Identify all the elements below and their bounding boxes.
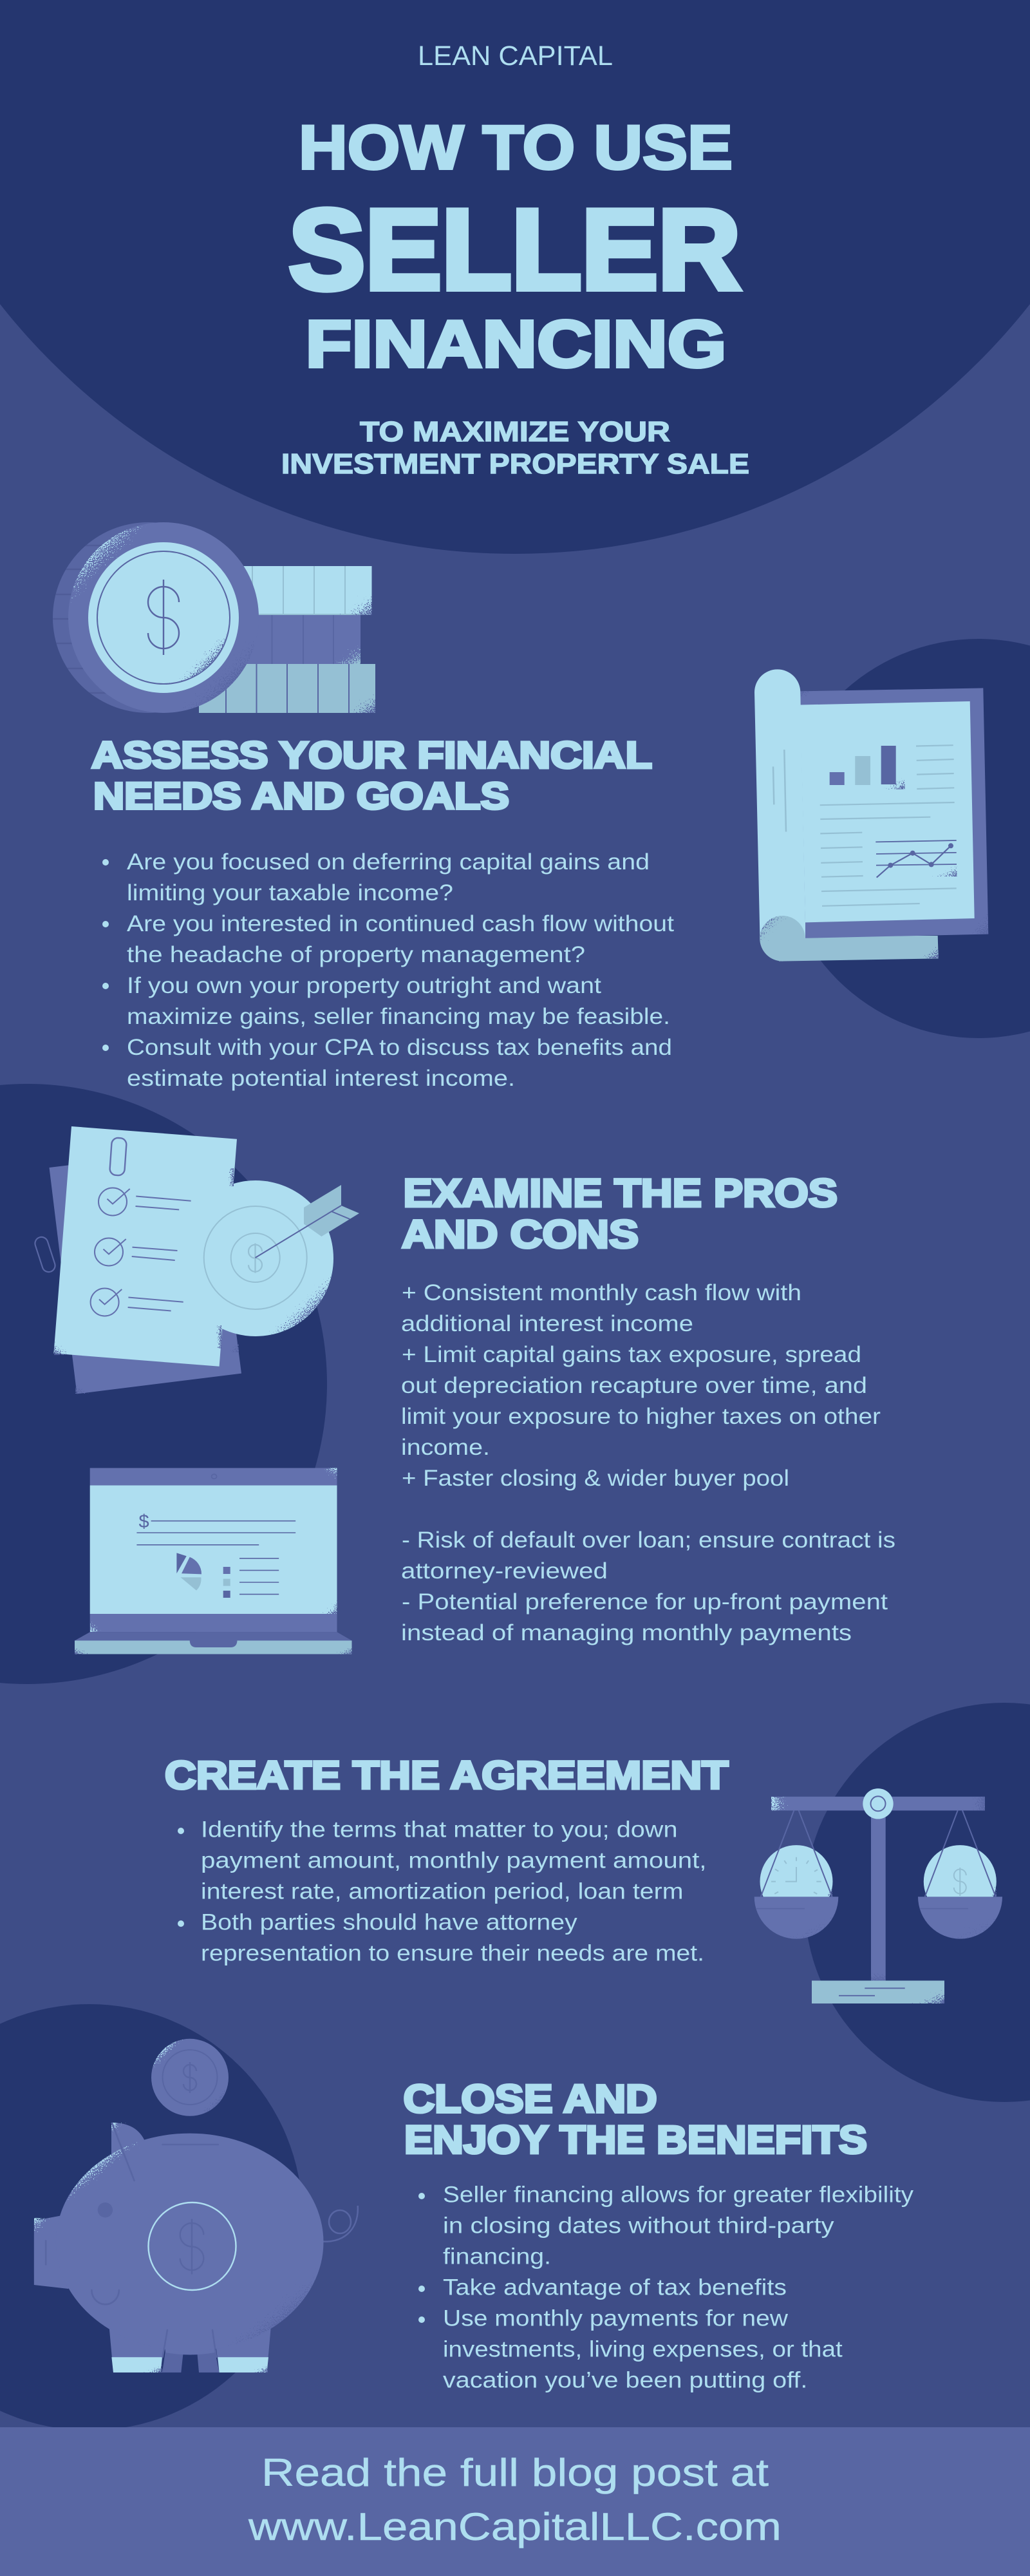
text block: assess bullets: maximize gains, seller financing may be feasible.: [127, 1003, 670, 1029]
pig hooves: [111, 2357, 268, 2372]
text block: agreement bullets: Both parties should have attorney: [201, 1909, 577, 1935]
text block: pros: [401, 1280, 881, 1491]
check item 2: [95, 1238, 178, 1266]
text block: agreement bullets: representation to ensure their needs are met.: [201, 1940, 704, 1966]
text block: pros: income.: [401, 1434, 490, 1460]
scale beam: [771, 1797, 985, 1810]
title: SELLER: [288, 185, 740, 313]
heading: close and enjoy: CLOSE AND: [404, 2077, 657, 2121]
rolled page: [754, 669, 805, 961]
heading: pros and cons: [402, 1171, 838, 1256]
text block: pros: + Faster closing & wider buyer pool: [402, 1465, 789, 1491]
line chart: [876, 840, 957, 878]
text block: pros: + Limit capital gains tax exposure, spread: [402, 1341, 861, 1367]
laptop screen: [90, 1485, 337, 1614]
pie chart: [176, 1553, 201, 1591]
text block: pros: limit your exposure to higher taxes on other: [401, 1403, 881, 1429]
text block: assess bullets: Consult with your CPA to discuss tax benefits and: [127, 1034, 672, 1060]
checklist sheet: [53, 1126, 237, 1367]
scale strings: [761, 1810, 996, 1897]
heading: create the agreement: CREATE THE AGREEMENT: [165, 1753, 729, 1797]
check item 3: [91, 1288, 183, 1316]
text block: cons: - Risk of default over loan; ensure contract is: [402, 1527, 895, 1553]
section 3 dark circle: [805, 1703, 1030, 2102]
title: FINANCING: [305, 307, 726, 381]
text block: assess bullets: Are you interested in continued cash flow without: [127, 911, 674, 936]
text block: assess bullets: Are you focused on deferring capital gains and: [127, 849, 650, 875]
front coin: [68, 522, 259, 713]
laptop lid: [90, 1468, 337, 1485]
scale base: [812, 1981, 944, 2003]
falling coin: [151, 2039, 229, 2116]
text block: assess bullets: If you own your property outright and want: [127, 972, 601, 998]
text block: cons: instead of managing monthly payments: [401, 1620, 852, 1645]
icon: laptop: [75, 1468, 351, 1654]
text block: benefits bullets: in closing dates without third-party: [443, 2212, 834, 2238]
icon: stacked coins: [52, 522, 375, 713]
text block: agreement bullets: Identify the terms that matter to you; down: [201, 1817, 677, 1842]
text block: cons: [401, 1527, 895, 1645]
text block: benefits bullets: [418, 2181, 913, 2392]
heading: close and enjoy: ENJOY THE BENEFITS: [404, 2118, 867, 2163]
footer call to action: www.LeanCapitalLLC.com: [248, 2505, 782, 2548]
icon: piggy bank: [34, 2039, 358, 2372]
heading: assess: NEEDS AND GOALS: [93, 775, 509, 817]
icon: checklist and target: [49, 1126, 359, 1394]
heading: pros and cons: AND CONS: [402, 1212, 639, 1256]
target rings: [204, 1206, 307, 1309]
text block: agreement bullets: [178, 1817, 707, 1966]
text block: benefits bullets: financing.: [443, 2243, 551, 2269]
pig far legs: [162, 2351, 220, 2372]
pig details: [46, 2123, 218, 2357]
back sheet: [800, 688, 988, 938]
text block: benefits bullets: vacation you’ve been putting off.: [443, 2367, 807, 2392]
text block: benefits bullets: Use monthly payments for new: [443, 2305, 788, 2331]
scale post: [871, 1813, 886, 1981]
subtitle: [281, 416, 749, 480]
paperclip: [109, 1137, 127, 1176]
back coin edge: [53, 522, 155, 713]
heading: close and enjoy: [404, 2077, 867, 2163]
scale hub: [863, 1788, 894, 1819]
text block: cons: attorney-reviewed: [401, 1558, 608, 1584]
coin stack bars: [199, 566, 375, 713]
text block: benefits bullets: investments, living expenses, or that: [443, 2336, 843, 2362]
text block: benefits bullets: Seller financing allows for greater flexibility: [443, 2181, 913, 2207]
heading: assess: ASSESS YOUR FINANCIAL: [91, 735, 652, 777]
left globe with clock: [760, 1845, 833, 1918]
header dark circle: [0, 0, 1030, 554]
title: [288, 113, 740, 381]
text lines: [820, 745, 957, 906]
legend: [223, 1558, 279, 1598]
right globe with dollar: [924, 1845, 997, 1918]
pig body: [34, 2123, 324, 2372]
back sheet: [49, 1148, 241, 1394]
subtitle: TO MAXIMIZE YOUR: [360, 416, 670, 448]
arrow: [255, 1185, 359, 1258]
brand name: LEAN CAPITAL: [418, 41, 613, 71]
bar chart: [830, 746, 905, 790]
text block: assess bullets: limiting your taxable income?: [127, 880, 453, 905]
text block: benefits bullets: Take advantage of tax benefits: [443, 2274, 787, 2300]
section 2 dark circle: [0, 1084, 327, 1684]
text block: agreement bullets: interest rate, amortization period, loan term: [201, 1879, 684, 1904]
text block: agreement bullets: payment amount, monthly payment amount,: [201, 1848, 707, 1873]
subtitle: INVESTMENT PROPERTY SALE: [281, 448, 749, 480]
footer: [0, 2427, 1030, 2576]
front sheet: [800, 701, 975, 922]
text block: pros: out depreciation recapture over time, and: [401, 1372, 867, 1398]
icon: loose paperclip: [33, 1235, 57, 1274]
footer call to action: [248, 2451, 782, 2548]
target disc: [178, 1180, 333, 1336]
heading: assess: [91, 735, 652, 817]
text block: cons: - Potential preference for up-front payment: [402, 1589, 888, 1615]
text block: assess bullets: [102, 849, 674, 1091]
check item 1: [98, 1188, 191, 1216]
lower page: [779, 936, 939, 961]
pig tail: [321, 2206, 358, 2242]
heading: pros and cons: EXAMINE THE PROS: [403, 1171, 838, 1216]
footer call to action: Read the full blog post at: [261, 2451, 769, 2494]
left pan: [754, 1897, 838, 1939]
text block: pros: additional interest income: [401, 1311, 693, 1336]
text block: assess bullets: the headache of property management?: [127, 942, 585, 967]
right pan: [918, 1897, 1002, 1939]
section 1 dark circle: [779, 639, 1030, 1038]
icon: balance scale: [754, 1788, 1002, 2003]
title: HOW TO USE: [299, 113, 733, 182]
laptop screen: $: [139, 1511, 149, 1532]
laptop base: [75, 1614, 351, 1654]
pig coin badge: [148, 2202, 236, 2290]
text block: assess bullets: estimate potential interest income.: [127, 1065, 515, 1091]
icon: financial document: [754, 669, 988, 961]
section 4 dark circle: [0, 2004, 303, 2430]
text block: pros: + Consistent monthly cash flow with: [402, 1280, 801, 1305]
